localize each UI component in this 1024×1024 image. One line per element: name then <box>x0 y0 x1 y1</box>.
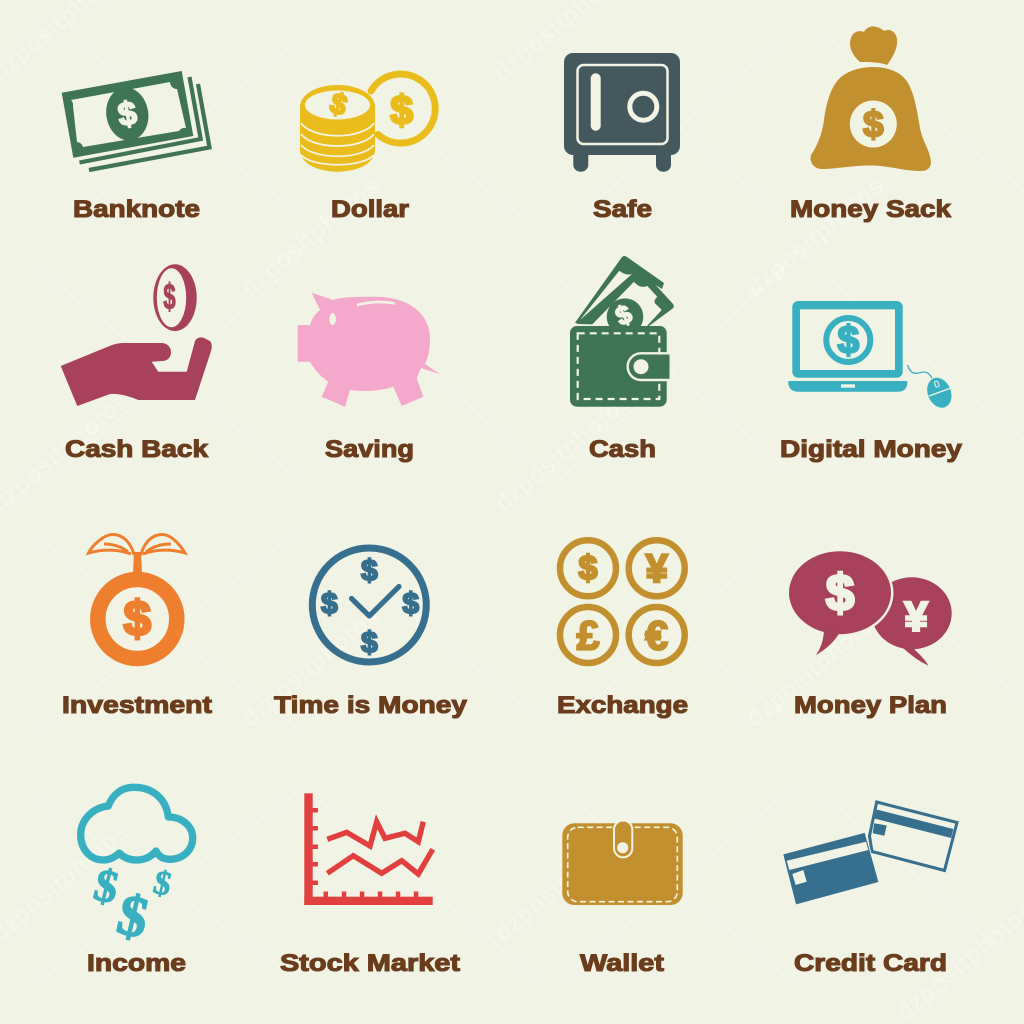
panel: exchange <box>557 540 688 719</box>
icon: hand with coin <box>61 264 212 406</box>
icon: four currency coins: $ <box>579 550 598 588</box>
label: Exchange: Exchange <box>557 692 688 719</box>
panel: credit card <box>783 802 957 977</box>
icon: cloud raining dollars: $ <box>90 858 123 913</box>
text: dzpositphotos <box>490 817 637 948</box>
icon: piggy bank <box>298 293 440 407</box>
panel: wallet <box>562 820 683 977</box>
panel: money sack <box>790 26 952 223</box>
icon: dollar coins: $ <box>326 87 351 123</box>
label: Wallet: Wallet <box>580 950 664 977</box>
label: Stock Market: Stock Market <box>280 950 460 977</box>
panel: digital money <box>780 301 963 463</box>
icon: laptop and mouse: $ <box>837 319 859 362</box>
icon: speech bubbles <box>786 549 952 666</box>
icon: clock with dollars: $ <box>361 626 378 660</box>
panel: income <box>81 787 193 977</box>
icon: cloud raining dollars: $ <box>112 881 155 951</box>
icon: speech bubbles: ¥ <box>904 593 928 640</box>
text: dzpositphotos <box>742 602 889 733</box>
label: Safe: Safe <box>593 196 652 223</box>
icon: line chart <box>304 793 433 905</box>
icon: wallet with banknotes <box>570 256 674 407</box>
icon: safe <box>564 53 680 172</box>
text: dzpositphotos <box>237 602 384 733</box>
icon: money sack: $ <box>863 104 884 144</box>
label: Time is Money: Time is Money <box>274 692 468 719</box>
text: dzpositphotos <box>490 387 637 518</box>
icon: clock with dollars: $ <box>361 554 378 588</box>
icon: wallet <box>562 820 683 905</box>
panel: cash back <box>61 264 212 463</box>
label: Cash: Cash <box>589 436 656 463</box>
icon: laptop and mouse <box>788 301 956 411</box>
panel: saving <box>298 293 440 463</box>
label: Dollar: Dollar <box>331 196 409 223</box>
icon: wallet with banknotes: $ <box>611 298 637 332</box>
icon: hand with coin: $ <box>163 278 176 317</box>
icon: dollar coins <box>300 74 435 172</box>
icon: cloud raining dollars <box>81 787 193 951</box>
panel: money plan <box>786 549 952 719</box>
text: dzpositphotos <box>742 172 889 303</box>
label: Money Sack: Money Sack <box>790 196 952 223</box>
label: Investment: Investment <box>62 692 212 719</box>
label: Credit Card: Credit Card <box>794 950 947 977</box>
label: Banknote: Banknote <box>73 196 200 223</box>
label: Saving: Saving <box>325 436 414 463</box>
label: Digital Money: Digital Money <box>780 436 963 463</box>
icon: clock with dollars: $ <box>321 588 338 620</box>
icon: two credit cards <box>783 802 957 905</box>
icon: coin with sprout <box>88 534 185 658</box>
icon: clock with dollars <box>312 548 426 662</box>
icon: dollar coins: $ <box>390 87 413 133</box>
panel: stock market <box>280 793 460 977</box>
label: Cash Back: Cash Back <box>65 436 209 463</box>
panel: investment <box>62 534 212 719</box>
panel: banknote <box>62 71 210 223</box>
icon: banknote: $ <box>115 94 139 133</box>
panel: dollar <box>300 74 435 223</box>
icon: four currency coins: ¥ <box>646 547 669 591</box>
icon: banknote <box>62 71 210 170</box>
icon: clock with dollars: $ <box>402 588 419 620</box>
icon: four currency coins: £ <box>577 612 600 658</box>
label: Income: Income <box>87 950 186 977</box>
icon: cloud raining dollars: $ <box>150 864 175 904</box>
icon: money sack <box>811 26 931 171</box>
panel: time is money <box>274 548 468 719</box>
label: Money Plan: Money Plan <box>794 692 947 719</box>
text: dzpositphotos <box>237 172 384 303</box>
icon: four currency coins <box>560 540 685 663</box>
icon: speech bubbles: $ <box>826 564 854 621</box>
icon: coin with sprout: $ <box>124 592 151 646</box>
panel: safe <box>564 53 680 223</box>
panel: cash <box>570 256 674 463</box>
icon: four currency coins: € <box>645 612 668 658</box>
